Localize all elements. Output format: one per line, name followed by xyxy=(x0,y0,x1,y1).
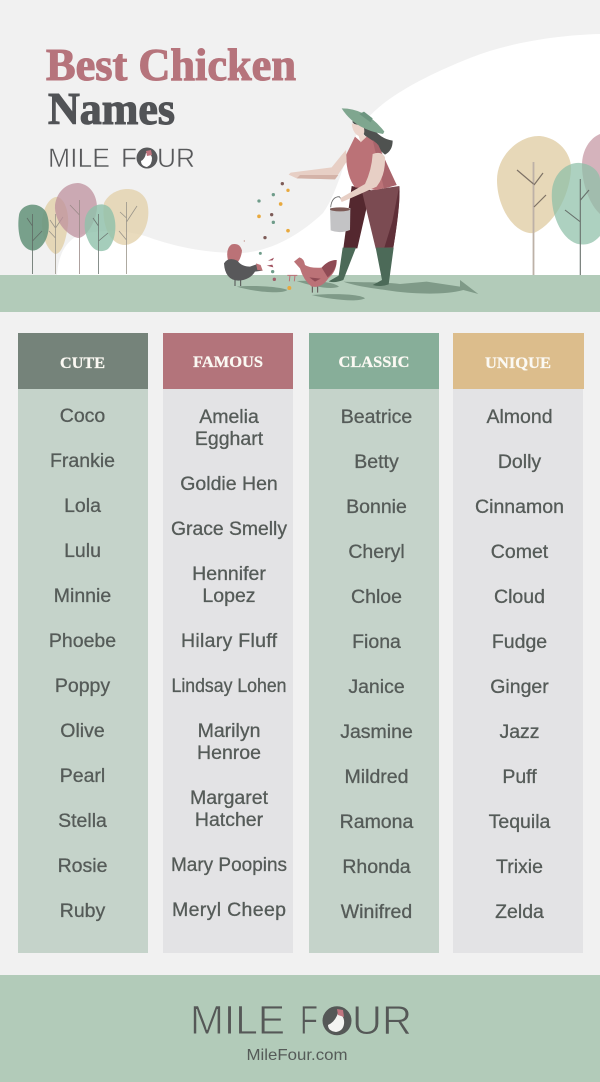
names list: Pearl xyxy=(60,765,105,787)
footer website: MileFour.com xyxy=(246,1047,348,1064)
header logo: Mile Four: F xyxy=(121,143,137,173)
neck and face xyxy=(352,123,367,142)
names list: Poppy xyxy=(55,675,110,697)
names list: Frankie xyxy=(50,450,115,472)
distant chick feet xyxy=(287,275,297,281)
tree: mauve xyxy=(582,134,600,214)
names list: Amelia xyxy=(199,406,259,428)
column body xyxy=(453,389,583,953)
header logo: Mile Four: UR xyxy=(157,143,195,173)
footer logo: Mile Four: F xyxy=(300,997,318,1043)
names list: Hennifer xyxy=(192,563,266,585)
names list: Marilyn xyxy=(198,720,260,742)
header logo: Mile Four: MILE xyxy=(48,143,110,173)
column header: FAMOUS xyxy=(193,354,263,371)
column header xyxy=(309,333,439,389)
right tree group xyxy=(497,134,600,275)
panel: famous column xyxy=(163,333,293,953)
names list xyxy=(49,405,116,922)
ground shadows xyxy=(237,280,478,300)
panel: classic column xyxy=(309,333,439,953)
names list: Lola xyxy=(64,495,101,517)
names list: Hatcher xyxy=(195,809,264,831)
panel: unique column xyxy=(453,333,584,953)
near arm xyxy=(340,153,385,202)
names list: Mary Poopins xyxy=(171,854,287,876)
names list: Dolly xyxy=(498,451,541,473)
names list: Zelda xyxy=(495,901,544,923)
names list: Goldie Hen xyxy=(180,473,278,495)
names list: Phoebe xyxy=(49,630,116,652)
names list: Cinnamon xyxy=(475,496,564,518)
names list: Hilary Fluff xyxy=(181,630,278,652)
shirt xyxy=(346,137,397,190)
names list: Meryl Cheep xyxy=(172,899,286,921)
names list xyxy=(340,406,414,923)
tree: mint xyxy=(552,163,600,275)
names list: Margaret xyxy=(190,787,269,809)
names list: Ruby xyxy=(60,900,106,922)
names list: Tequila xyxy=(489,811,551,833)
outstretched arm xyxy=(289,150,347,179)
column header: CLASSIC xyxy=(338,354,410,371)
names list: Fudge xyxy=(492,631,547,653)
title line: Best Chicken: Best Chicken xyxy=(46,40,296,90)
names list: Ramona xyxy=(340,811,414,833)
names list: Jasmine xyxy=(340,721,413,743)
names list: Bonnie xyxy=(346,496,407,518)
names list xyxy=(475,406,564,923)
title xyxy=(46,40,296,134)
footer logo: Mile Four: UR xyxy=(352,997,412,1043)
names list: Janice xyxy=(348,676,405,698)
bucket xyxy=(330,197,350,232)
ground strip xyxy=(0,275,600,312)
names list: Almond xyxy=(486,406,553,428)
names list: Mildred xyxy=(345,766,408,788)
names list: Puff xyxy=(502,766,537,788)
column header: CUTE xyxy=(60,355,105,372)
boots xyxy=(329,248,356,282)
names list: Cheryl xyxy=(348,541,405,563)
column body xyxy=(18,389,148,953)
footer logo: Mile Four: MILE xyxy=(190,997,285,1043)
column body xyxy=(163,389,293,953)
column header xyxy=(163,333,293,389)
names list: Minnie xyxy=(54,585,111,607)
column body xyxy=(309,389,439,953)
names list: Lindsay Lohen xyxy=(172,675,286,697)
names list: Comet xyxy=(491,541,549,563)
tree: mint xyxy=(85,204,115,274)
names list: Lopez xyxy=(202,585,256,607)
column header xyxy=(18,333,148,389)
names list: Rhonda xyxy=(342,856,411,878)
names list: Lulu xyxy=(64,540,101,562)
names list: Jazz xyxy=(499,721,540,743)
hen xyxy=(294,257,337,293)
names list: Henroe xyxy=(197,742,261,764)
names list: Stella xyxy=(58,810,107,832)
white hill backdrop xyxy=(57,34,600,276)
tree: tan xyxy=(497,136,571,275)
names list: Ginger xyxy=(490,676,549,698)
names list: Coco xyxy=(60,405,105,427)
left leg xyxy=(343,186,371,248)
names list: Betty xyxy=(354,451,399,473)
footer band xyxy=(0,975,600,1082)
hair xyxy=(352,121,393,155)
panel: cute column xyxy=(18,333,148,953)
illustration: woman and chickens xyxy=(224,108,478,300)
names list: Cloud xyxy=(494,586,545,608)
names list: Chloe xyxy=(351,586,402,608)
names list: Rosie xyxy=(58,855,107,877)
header logo: Mile Four xyxy=(48,143,195,173)
names list: Grace Smelly xyxy=(171,518,287,540)
tree: tan right xyxy=(103,189,148,274)
title line: Names: Names xyxy=(48,84,175,134)
left tree group xyxy=(18,183,148,274)
feed dots xyxy=(244,182,291,290)
hat xyxy=(342,108,384,134)
right leg xyxy=(362,186,400,248)
names list xyxy=(171,406,287,921)
names list: Beatrice xyxy=(341,406,412,428)
names list: Olive xyxy=(60,720,105,742)
names list: Trixie xyxy=(496,856,543,878)
column header xyxy=(453,333,584,389)
footer logo: Mile Four xyxy=(190,997,412,1043)
names list: Egghart xyxy=(195,428,264,450)
tree: tan left xyxy=(42,197,68,274)
names list: Winifred xyxy=(341,901,412,923)
names list: Fiona xyxy=(352,631,401,653)
rooster xyxy=(224,244,263,286)
tree: mauve xyxy=(55,183,97,274)
tree: dark green xyxy=(18,205,49,274)
column header: UNIQUE xyxy=(485,355,551,372)
